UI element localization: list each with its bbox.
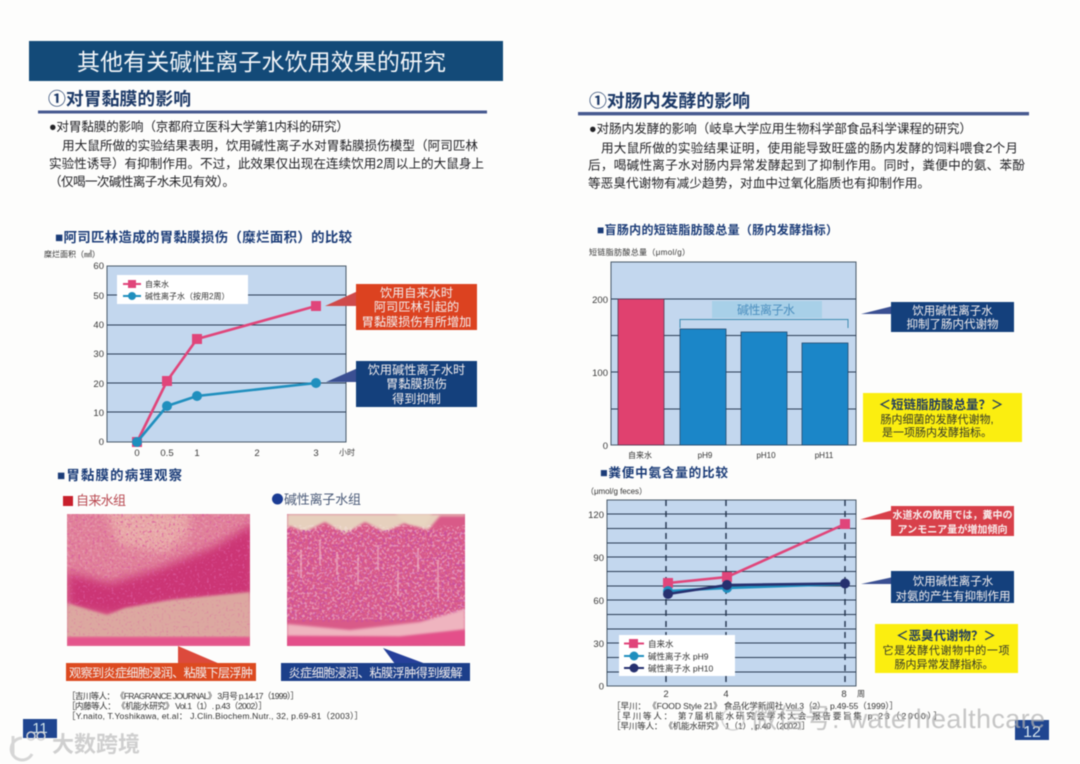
x axis labels: pH10: [756, 451, 776, 460]
callout: tap water increases ammonia: 水道水の飲用では，糞中の: [892, 508, 1012, 522]
x axis labels: 8: [841, 689, 847, 700]
x axis labels: 0.5: [160, 448, 174, 459]
y axis labels: 200: [592, 295, 608, 306]
pale streaks between glands: [301, 540, 438, 598]
watermark: left logo: 大数跨境: [52, 732, 140, 757]
series: alkaline pH10: [663, 578, 850, 599]
text block: stomach mucosa study: 用大鼠所做的实验结果表明，饮用碱性离子水对胃黏膜损伤模型（阿司匹林: [62, 138, 478, 153]
x axis labels: 2: [254, 448, 260, 459]
text block: stomach mucosa study: [49, 119, 484, 189]
legend: 碱性离子水（按用2周）: [145, 291, 229, 301]
note: what are short-chain fatty acids: ＜短链脂肪酸总量？＞: [878, 397, 1004, 412]
line chart: erosion area: 糜烂面积（㎟）: [44, 249, 100, 259]
x axis labels: 1: [194, 448, 200, 459]
x axis labels: 0: [134, 448, 140, 459]
y axis labels: 30: [593, 639, 604, 650]
heading: short-chain fatty acids: ■盲肠内的短链脂肪酸总量（肠内发酵指标）: [597, 222, 838, 237]
x axis labels: [628, 450, 834, 460]
x axis labels: pH11: [815, 451, 834, 460]
callout: metabolites suppressed: 抑制了肠内代谢物: [906, 317, 998, 331]
legend: 碱性离子水 pH10: [648, 664, 713, 674]
legend: 自来水: [648, 639, 674, 649]
callout: alkaline water suppresses damage: 胃黏膜损伤: [386, 377, 447, 391]
text block: left references: ［吉川等人： 《FRAGRANCE JOURNAL》 3月号 p.14-17（1999）］: [67, 690, 299, 701]
panel: right section heading: [578, 90, 1029, 115]
callout: alkaline water suppresses damage: 饮用碱性离子水时: [368, 362, 465, 377]
callout: tap water increases ammonia: アンモニア量が増加傾向: [898, 523, 1008, 536]
series: alkaline water: [132, 378, 321, 447]
y axis labels: 0: [599, 682, 604, 692]
line chart: fecal ammonia: （μmol/g feces）: [586, 487, 647, 496]
callout: metabolites suppressed: 饮用碱性离子水: [912, 304, 993, 318]
callout: alkaline water suppresses ammonia: 对氨的产生有抑制作用: [896, 589, 1010, 603]
note: what are malodorous metabolites: [875, 624, 1018, 673]
note: what are malodorous metabolites: ＜恶臭代谢物？＞: [896, 628, 996, 643]
panel: alkaline water group: [272, 492, 470, 681]
heading: pathology observation: ■胃黏膜的病理观察: [57, 467, 183, 483]
y axis labels: 40: [93, 320, 104, 331]
callout: tap water increases damage: 饮用自来水时: [380, 286, 453, 300]
y axis labels: 30: [93, 349, 104, 360]
callout: alkaline water suppresses ammonia: [861, 571, 1014, 603]
callout: tap water increases damage: 阿司匹林引起的: [374, 299, 459, 314]
callout arrow and label: tap water finding: [66, 646, 256, 681]
callout: tap water increases ammonia: [860, 506, 1014, 536]
heading: ammonia in feces: ■粪便中氨含量的比较: [600, 465, 728, 480]
callout arrow and label: alkaline water finding: 炎症细胞浸润、粘膜浮肿得到缓解: [288, 665, 462, 680]
label: tap water group: 自来水组: [76, 493, 126, 508]
x axis labels: 4: [723, 689, 729, 700]
series: tap water: [663, 519, 850, 588]
text block: stomach mucosa study: ●对胃黏膜的影响（京都府立医科大学第1内科的研究）: [49, 119, 349, 134]
x axis labels: 2: [663, 689, 669, 700]
bar chart: short-chain fatty acids: 短链脂肪酸总量（μmol/g）: [589, 247, 690, 257]
note: what are malodorous metabolites: 它是发酵代谢物中的一项: [882, 643, 1010, 657]
note: what are short-chain fatty acids: 是一项肠内发酵指标。: [882, 425, 992, 439]
text block: left references: ［内藤等人： 《机能水研究》 Vol.1（1）. p.43（2002）］: [67, 700, 267, 711]
x axis labels: [663, 689, 865, 700]
text block: stomach mucosa study: 实验性诱导）有抑制作用。不过，此效果仅出现在连续饮用2周以上的大鼠身上: [49, 156, 484, 171]
text block: intestinal fermentation study: ●对肠内发酵的影响（岐阜大学应用生物科学部食品科学课程的研究）: [589, 121, 972, 136]
watermark: wechat id: 微信号: waterhealthcare: [750, 704, 1045, 734]
callout: alkaline water suppresses ammonia: 饮用碱性离子水: [913, 574, 994, 588]
legend: 碱性离子水 pH9: [648, 652, 709, 662]
text block: intestinal fermentation study: 等恶臭代谢物有减少趋势，对血中过氧化脂质也有抑制作用。: [588, 176, 930, 190]
label: alkaline water group: 碱性离子水组: [284, 492, 361, 507]
title banner: 其他有关碱性离子水饮用效果的研究: [77, 49, 446, 75]
x axis labels: 自来水: [628, 450, 652, 460]
watermark: left logo: [11, 732, 140, 760]
bracket: alkaline water group: [680, 301, 848, 328]
image: tap water tissue section: [67, 510, 255, 646]
y axis labels: 120: [588, 510, 604, 521]
series: alkaline pH9: [663, 583, 845, 596]
legend: [619, 635, 735, 676]
y axis labels: 100: [592, 368, 608, 379]
note: what are short-chain fatty acids: [863, 393, 1022, 442]
x axis labels: 3: [313, 448, 319, 459]
callout: tap water increases damage: [325, 284, 477, 330]
text block: intestinal fermentation study: 后，喝碱性离子水对肠内异常发酵起到了抑制作用。同时，粪便中的氨、苯酚: [588, 158, 1025, 172]
bar chart: short-chain fatty acids: [589, 247, 856, 460]
note: what are short-chain fatty acids: 肠内细菌的发酵代谢物,: [880, 412, 994, 426]
image: alkaline water tissue section: [287, 514, 465, 646]
panel: left section heading: ①对胃黏膜的影响: [48, 89, 191, 109]
bar: pH11: [802, 343, 848, 445]
y axis labels: 20: [93, 379, 104, 390]
y axis labels: 50: [93, 291, 104, 302]
heading: aspirin damage comparison: ■阿司匹林造成的胃黏膜损伤（糜烂面积）的比较: [55, 229, 353, 245]
y axis labels: [592, 295, 608, 452]
y axis labels: 60: [93, 261, 104, 272]
title banner: [29, 41, 503, 81]
y axis labels: 0: [603, 441, 608, 452]
bar: pH10: [741, 332, 787, 445]
text block: stomach mucosa study: （仅喝一次碱性离子水未见有效）。: [49, 174, 235, 189]
x axis labels: 小时: [339, 447, 355, 457]
text block: left references: ［Y.naito, T.Yoshikawa, et.al： J.Clin.Biochem.Nutr., 32, p.69-81（2003）］: [67, 711, 363, 721]
text block: intestinal fermentation study: [588, 121, 1025, 190]
callout: alkaline water suppresses damage: 得到抑制: [392, 391, 441, 406]
legend: 自来水: [145, 279, 169, 289]
y axis labels: 90: [593, 553, 604, 564]
y axis labels: [588, 510, 604, 692]
x axis labels: 周: [857, 690, 865, 698]
note: what are malodorous metabolites: 肠内异常发酵指标。: [894, 657, 994, 671]
y axis labels: [93, 261, 104, 448]
callout: tap water increases damage: 胃黏膜损伤有所增加: [362, 314, 471, 329]
panel: right section heading: ①对肠内发酵的影响: [589, 90, 750, 111]
page number 11: [23, 719, 57, 738]
line chart: fecal ammonia: [586, 487, 865, 700]
callout arrow and label: alkaline water finding: [281, 648, 470, 681]
page number 12: 12: [1023, 724, 1041, 741]
panel: left section heading: [38, 89, 487, 114]
legend: [117, 275, 248, 304]
y axis labels: 0: [99, 437, 104, 448]
panel: tap water group: [63, 493, 256, 681]
text block: right references: ［早川等人： 《机能水研究》 1（1）, p.40（2002）］: [612, 720, 810, 731]
text block: left references: [67, 690, 363, 721]
callout: alkaline water suppresses damage: [326, 361, 477, 407]
callout: metabolites suppressed: [861, 302, 1014, 332]
line chart: erosion area: [44, 249, 355, 459]
y axis labels: 10: [93, 408, 104, 419]
x axis labels: [134, 447, 355, 459]
y axis labels: 60: [593, 596, 604, 607]
page number 12: [1015, 720, 1049, 741]
page number 11: 11: [32, 720, 48, 737]
bracket: alkaline water group: 碱性离子水: [737, 302, 795, 317]
text block: intestinal fermentation study: 用大鼠所做的实验结果证明，使用能导致旺盛的肠内发酵的饲料喂食2个月: [601, 140, 1018, 156]
text block: right references: ［早川： 《FOOD Style 21》 食品化学新闻社 Vol.3（2）, p.49-55（1999）］: [612, 700, 898, 711]
text block: right references: ［早川等人： 第7届机能水研究会学术大会 报告要旨集 p.23（2000）］: [612, 710, 942, 721]
x axis labels: pH9: [698, 451, 713, 460]
series: tap water: [132, 301, 321, 447]
bar: pH9: [680, 329, 726, 445]
text block: right references: [612, 700, 942, 731]
bar: tap water: [618, 299, 664, 445]
callout arrow and label: tap water finding: 观察到炎症细胞浸润、粘膜下层浮肿: [69, 665, 253, 680]
